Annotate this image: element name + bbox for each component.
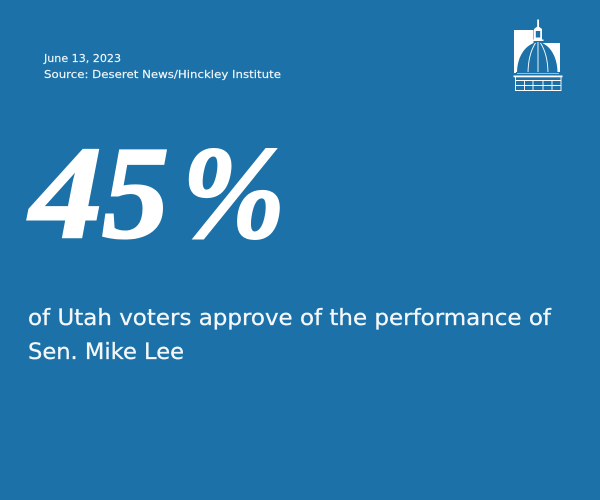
- headline figure: 45%: [27, 119, 285, 266]
- description text: [28, 306, 552, 365]
- date and source text: June 13, 2023: [43, 52, 121, 65]
- date and source text: Source: Deseret News/Hinckley Institute: [44, 68, 281, 81]
- description text: of Utah voters approve of the performance of: [28, 306, 552, 331]
- headline figure: 45%: 5: [102, 119, 169, 266]
- headline figure: 45%: %: [182, 119, 285, 266]
- description text: Sen. Mike Lee: [28, 340, 184, 365]
- icon: capitol dome logo: [514, 20, 562, 90]
- headline figure: 45%: 4: [27, 119, 102, 266]
- date and source text: [43, 52, 281, 81]
